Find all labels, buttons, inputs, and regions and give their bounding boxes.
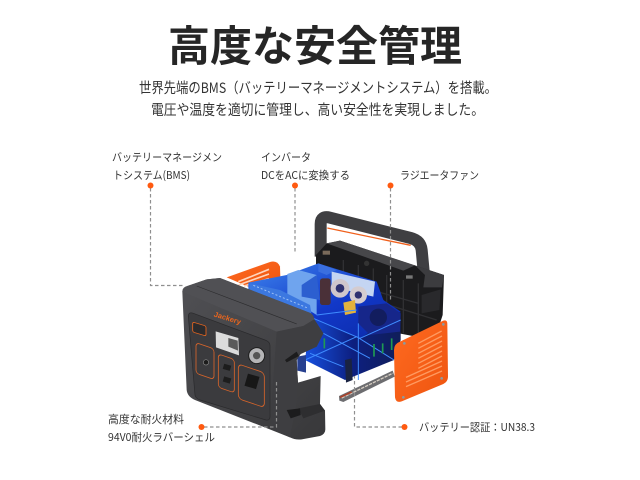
subtitle text: 世界先端のBMS（バッテリーマネージメントシステム）を搭載。 — [139, 77, 497, 98]
label: inverter — [261, 149, 350, 183]
leader line: BMS — [148, 182, 184, 286]
leader line: battery — [354, 376, 408, 430]
right orange vent panel — [394, 320, 448, 402]
label: fire resistant material — [108, 411, 215, 445]
label: radiator fan: ラジエータファン — [400, 167, 479, 183]
label: inverter: インバータ — [261, 149, 311, 165]
LCD display — [216, 331, 239, 355]
label: inverter: DCをACに変換する — [261, 167, 350, 183]
front power unit — [182, 278, 325, 439]
rear housing with handle — [316, 217, 444, 337]
leader line: inverter — [292, 182, 298, 253]
leader line: radiator fan — [388, 182, 394, 300]
Jackery logo: Jackery — [213, 310, 243, 327]
subtitle text — [139, 77, 497, 120]
label: battery certification: バッテリー認証：UN38.3 — [419, 419, 535, 435]
circuit strip — [339, 371, 395, 402]
outlet outlines — [196, 343, 214, 379]
label: BMS: バッテリーマネージメン — [112, 149, 222, 165]
label: fire resistant material: 高度な耐火材料 — [108, 411, 184, 427]
label: BMS — [112, 149, 222, 183]
blue transparent internals — [248, 263, 401, 383]
subtitle text: 電圧や温度を適切に管理し、高い安全性を実現しました。 — [151, 99, 484, 120]
product illustration — [182, 217, 448, 439]
left orange vent panel — [227, 262, 281, 287]
title: 高度な安全管理 — [168, 13, 462, 74]
leader line: rubber shell — [198, 382, 276, 430]
label: fire resistant material: 94V0耐火ラバーシェル — [108, 429, 215, 445]
label: BMS: トシステム(BMS) — [113, 167, 190, 183]
